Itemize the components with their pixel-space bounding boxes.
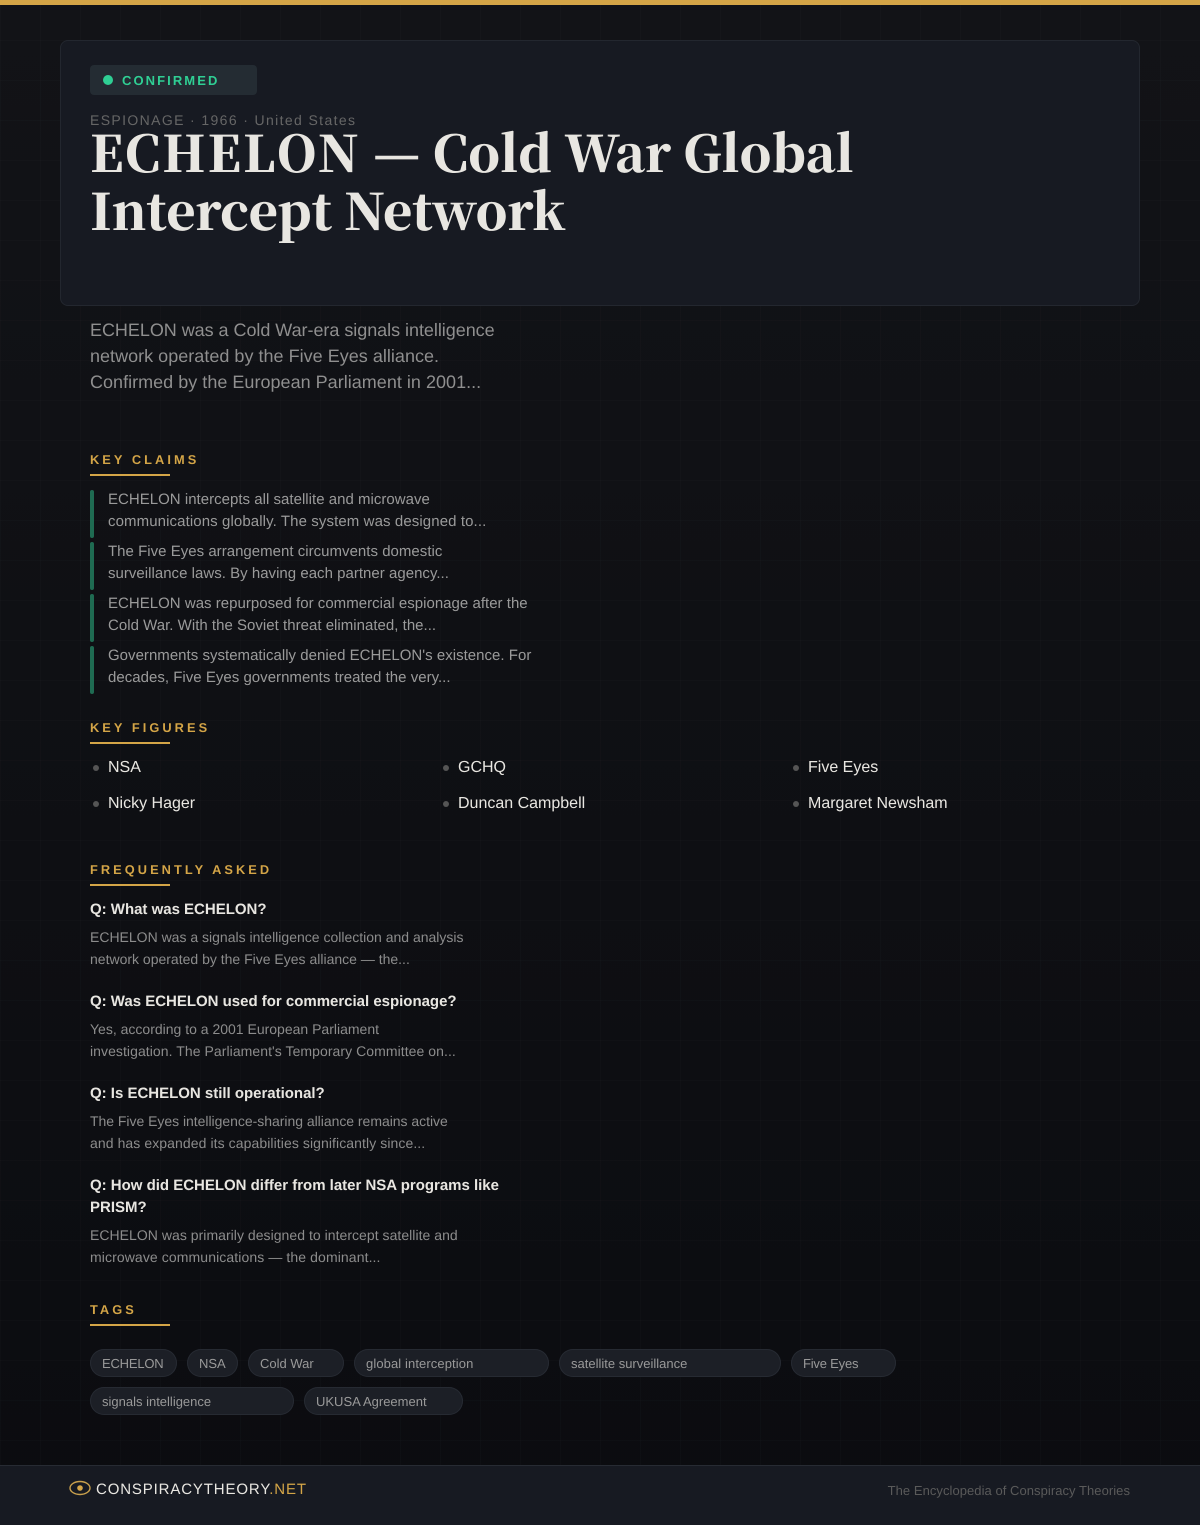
claim 4 — [90, 646, 532, 694]
FAQ 1 answer — [90, 929, 464, 967]
figure: NSA — [93, 759, 141, 776]
claim 4: Governments systematically denied ECHELON's existence. For — [108, 647, 531, 664]
FAQ 2 question: Q: Was ECHELON used for commercial espionage? — [90, 992, 457, 1010]
tag — [559, 1349, 781, 1377]
tag: UKUSA Agreement — [316, 1394, 427, 1409]
panel: hero header — [60, 40, 1140, 306]
figure: Five Eyes: Five Eyes — [808, 759, 878, 776]
badge label: CONFIRMED — [122, 73, 219, 88]
figure: GCHQ: GCHQ — [458, 759, 506, 776]
title — [90, 115, 854, 245]
summary text — [90, 320, 495, 392]
tag: signals intelligence — [102, 1394, 211, 1409]
panel: key claims — [90, 490, 532, 694]
tag — [354, 1349, 549, 1377]
tag — [304, 1387, 463, 1415]
claim 1: communications globally. The system was designed to... — [108, 513, 486, 530]
figure: Margaret Newsham: Margaret Newsham — [808, 795, 948, 812]
claim 1: ECHELON intercepts all satellite and microwave — [108, 491, 430, 508]
FAQ 4 answer: ECHELON was primarily designed to intercept satellite and — [90, 1227, 458, 1243]
status badge — [90, 65, 257, 95]
figure: Nicky Hager: Nicky Hager — [108, 795, 195, 812]
FAQ 4 answer: microwave communications — the dominant... — [90, 1249, 381, 1265]
title: ECHELON — Cold War Global — [90, 115, 854, 187]
footer logo text: CONSPIRACYTHEORY.NET — [96, 1480, 307, 1498]
claim 1 — [90, 490, 486, 538]
claim 3: ECHELON was repurposed for commercial espionage after the — [108, 595, 528, 612]
FAQ 4 question: PRISM? — [90, 1198, 147, 1216]
summary text: Confirmed by the European Parliament in 2001... — [90, 372, 481, 392]
figure: Duncan Campbell: Duncan Campbell — [458, 795, 585, 812]
icon: eye logo — [69, 1480, 91, 1496]
status dot — [103, 75, 113, 85]
claim 2: surveillance laws. By having each partner agency... — [108, 565, 449, 582]
title: Intercept Network — [90, 173, 565, 245]
claim 2 — [90, 542, 449, 590]
tag: satellite surveillance — [571, 1356, 687, 1371]
tag: ECHELON — [102, 1356, 163, 1371]
tag — [90, 1387, 294, 1415]
tag: NSA — [199, 1356, 226, 1371]
FAQ 4 question: Q: How did ECHELON differ from later NSA programs like — [90, 1176, 499, 1194]
tag list — [90, 1349, 896, 1415]
section heading: key figures: KEY FIGURES — [90, 720, 210, 735]
tag — [248, 1349, 344, 1377]
FAQ 4 answer — [90, 1227, 458, 1265]
panel: key figures — [93, 759, 948, 812]
category meta line: ESPIONAGE · 1966 · United States — [90, 112, 356, 128]
top accent bar — [0, 0, 1200, 5]
FAQ 4 question — [90, 1176, 499, 1216]
FAQ 1 answer: network operated by the Five Eyes alliance — the... — [90, 951, 410, 967]
tag — [187, 1349, 238, 1377]
tag — [90, 1349, 177, 1377]
section heading: frequently asked: FREQUENTLY ASKED — [90, 862, 272, 877]
claim 4: decades, Five Eyes governments treated the very... — [108, 669, 451, 686]
section heading: tags: TAGS — [90, 1302, 137, 1317]
footer — [0, 1465, 1200, 1525]
FAQ 1 question: Q: What was ECHELON? — [90, 900, 266, 918]
FAQ 1 answer: ECHELON was a signals intelligence collection and analysis — [90, 929, 464, 945]
FAQ 2 answer: investigation. The Parliament's Temporary Committee on... — [90, 1043, 456, 1059]
FAQ 3 question: Q: Is ECHELON still operational? — [90, 1084, 325, 1102]
tag: Five Eyes — [803, 1356, 858, 1371]
claim 2: The Five Eyes arrangement circumvents domestic — [108, 543, 442, 560]
FAQ 3 answer: and has expanded its capabilities significantly since... — [90, 1135, 425, 1151]
tag: global interception — [366, 1356, 473, 1371]
summary text: network operated by the Five Eyes alliance. — [90, 346, 439, 366]
section heading: key claims: KEY CLAIMS — [90, 452, 199, 467]
FAQ 2 answer — [90, 1021, 456, 1059]
tag: Cold War — [260, 1356, 314, 1371]
claim 3 — [90, 594, 528, 642]
summary text: ECHELON was a Cold War-era signals intelligence — [90, 320, 495, 340]
figure: NSA: NSA — [108, 759, 141, 776]
claim 3: Cold War. With the Soviet threat eliminated, the... — [108, 617, 436, 634]
FAQ 3 answer — [90, 1113, 448, 1151]
FAQ 2 answer: Yes, according to a 2001 European Parliament — [90, 1021, 379, 1037]
footer tagline: The Encyclopedia of Conspiracy Theories — [888, 1483, 1130, 1498]
FAQ 3 answer: The Five Eyes intelligence-sharing alliance remains active — [90, 1113, 448, 1129]
tag — [791, 1349, 896, 1377]
